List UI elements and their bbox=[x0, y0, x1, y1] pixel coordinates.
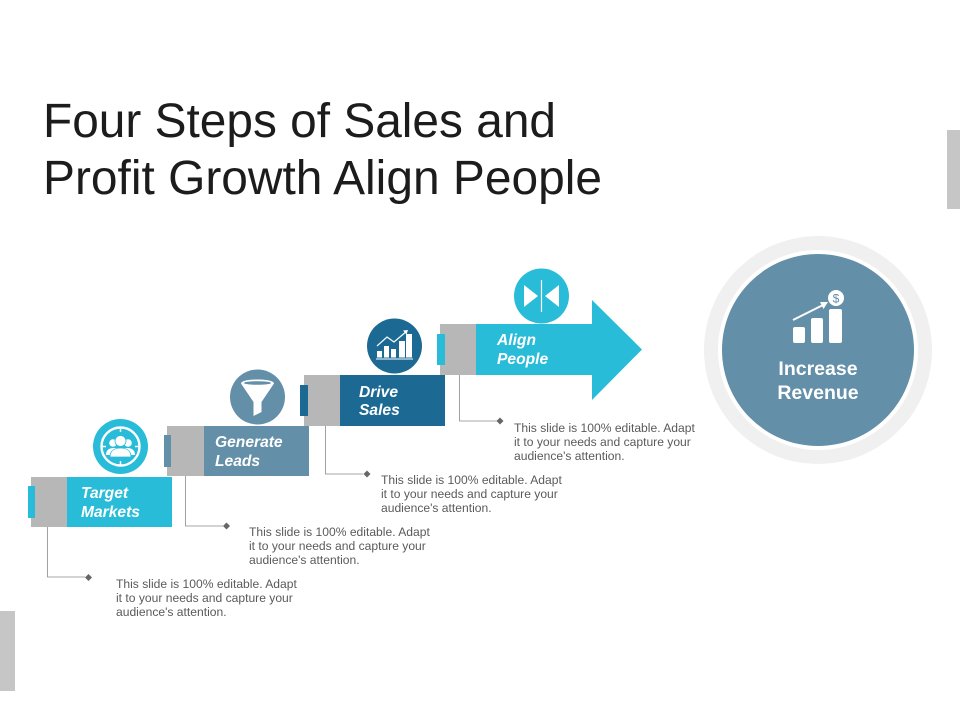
step 3 label bbox=[359, 384, 400, 419]
step 1 label: Target bbox=[81, 485, 129, 502]
icon: target with people bbox=[93, 419, 148, 474]
step 2 tab bbox=[164, 435, 171, 467]
step 3 description: This slide is 100% editable. Adapt bbox=[381, 473, 562, 487]
icon: align arrows bbox=[514, 268, 569, 324]
step 2 label: Generate bbox=[215, 434, 283, 451]
title bbox=[43, 95, 602, 205]
step 3 description: audience's attention. bbox=[381, 501, 492, 515]
step 3 marker bbox=[364, 470, 370, 478]
step 2 connector bbox=[186, 476, 223, 526]
step 3 description: it to your needs and capture your bbox=[381, 487, 558, 501]
step 3 label: Drive bbox=[359, 384, 398, 401]
step 4 description: This slide is 100% editable. Adapt bbox=[514, 421, 695, 435]
step 2 gray block bbox=[167, 426, 204, 476]
step 1 description: it to your needs and capture your bbox=[116, 591, 293, 605]
title: Four Steps of Sales and bbox=[43, 95, 556, 148]
white gap bbox=[718, 250, 918, 450]
step 4 label: Align bbox=[496, 332, 536, 349]
outer ring bbox=[704, 236, 932, 464]
icon: revenue growth bars bbox=[793, 290, 844, 343]
step 1 bar bbox=[67, 477, 172, 527]
step 1: Target Markets bbox=[28, 419, 297, 619]
step 1 description bbox=[116, 577, 297, 619]
step 3 tab bbox=[300, 385, 308, 416]
step 3: Drive Sales bbox=[300, 318, 562, 515]
step 1 marker bbox=[85, 574, 92, 581]
step 2 bar bbox=[204, 426, 309, 476]
step 4 description bbox=[514, 421, 695, 463]
step 2: Generate Leads bbox=[164, 370, 430, 567]
result circle: Increase Revenue bbox=[704, 236, 932, 464]
step 1 label bbox=[81, 485, 140, 521]
icon: revenue growth bars: $ bbox=[833, 292, 840, 306]
icon: funnel bbox=[230, 370, 285, 424]
step 1 gray block bbox=[31, 477, 67, 527]
decorative side tab: right bbox=[947, 130, 960, 209]
step 4 description: it to your needs and capture your bbox=[514, 435, 691, 449]
icon: rising bar chart bbox=[367, 318, 422, 374]
step 2 description: it to your needs and capture your bbox=[249, 539, 426, 553]
step 4 label: People bbox=[497, 351, 548, 368]
result label: Revenue bbox=[777, 382, 859, 404]
step 1 description: This slide is 100% editable. Adapt bbox=[116, 577, 297, 591]
step 2 description: This slide is 100% editable. Adapt bbox=[249, 525, 430, 539]
step 1 label: Markets bbox=[81, 504, 140, 521]
step 3 description bbox=[381, 473, 562, 515]
step 1 connector bbox=[48, 527, 85, 577]
step 2 label bbox=[215, 434, 283, 470]
step 3 label: Sales bbox=[359, 402, 400, 419]
decorative side tab: left bbox=[0, 611, 15, 691]
step 1 tab bbox=[28, 486, 35, 518]
inner disc bbox=[722, 254, 914, 446]
result label: Increase bbox=[778, 358, 858, 380]
step 3 gray block bbox=[304, 375, 340, 426]
step 2 marker bbox=[223, 522, 230, 530]
result label bbox=[777, 358, 859, 404]
step 4 marker bbox=[496, 418, 504, 424]
step 1 description: audience's attention. bbox=[116, 605, 227, 619]
step 4: Align People bbox=[437, 268, 695, 463]
step 2 label: Leads bbox=[215, 453, 260, 470]
title: Profit Growth Align People bbox=[43, 152, 602, 205]
step 4 gray block bbox=[440, 324, 476, 375]
step 4 label bbox=[496, 332, 548, 368]
step 2 description bbox=[249, 525, 430, 567]
step 3 connector bbox=[326, 426, 363, 474]
step 4 tab bbox=[437, 334, 445, 365]
step 4 description: audience's attention. bbox=[514, 449, 625, 463]
step 3 bar bbox=[340, 375, 445, 426]
step 2 description: audience's attention. bbox=[249, 553, 360, 567]
step 4 connector bbox=[460, 375, 497, 421]
step 4 arrow bbox=[476, 300, 642, 400]
